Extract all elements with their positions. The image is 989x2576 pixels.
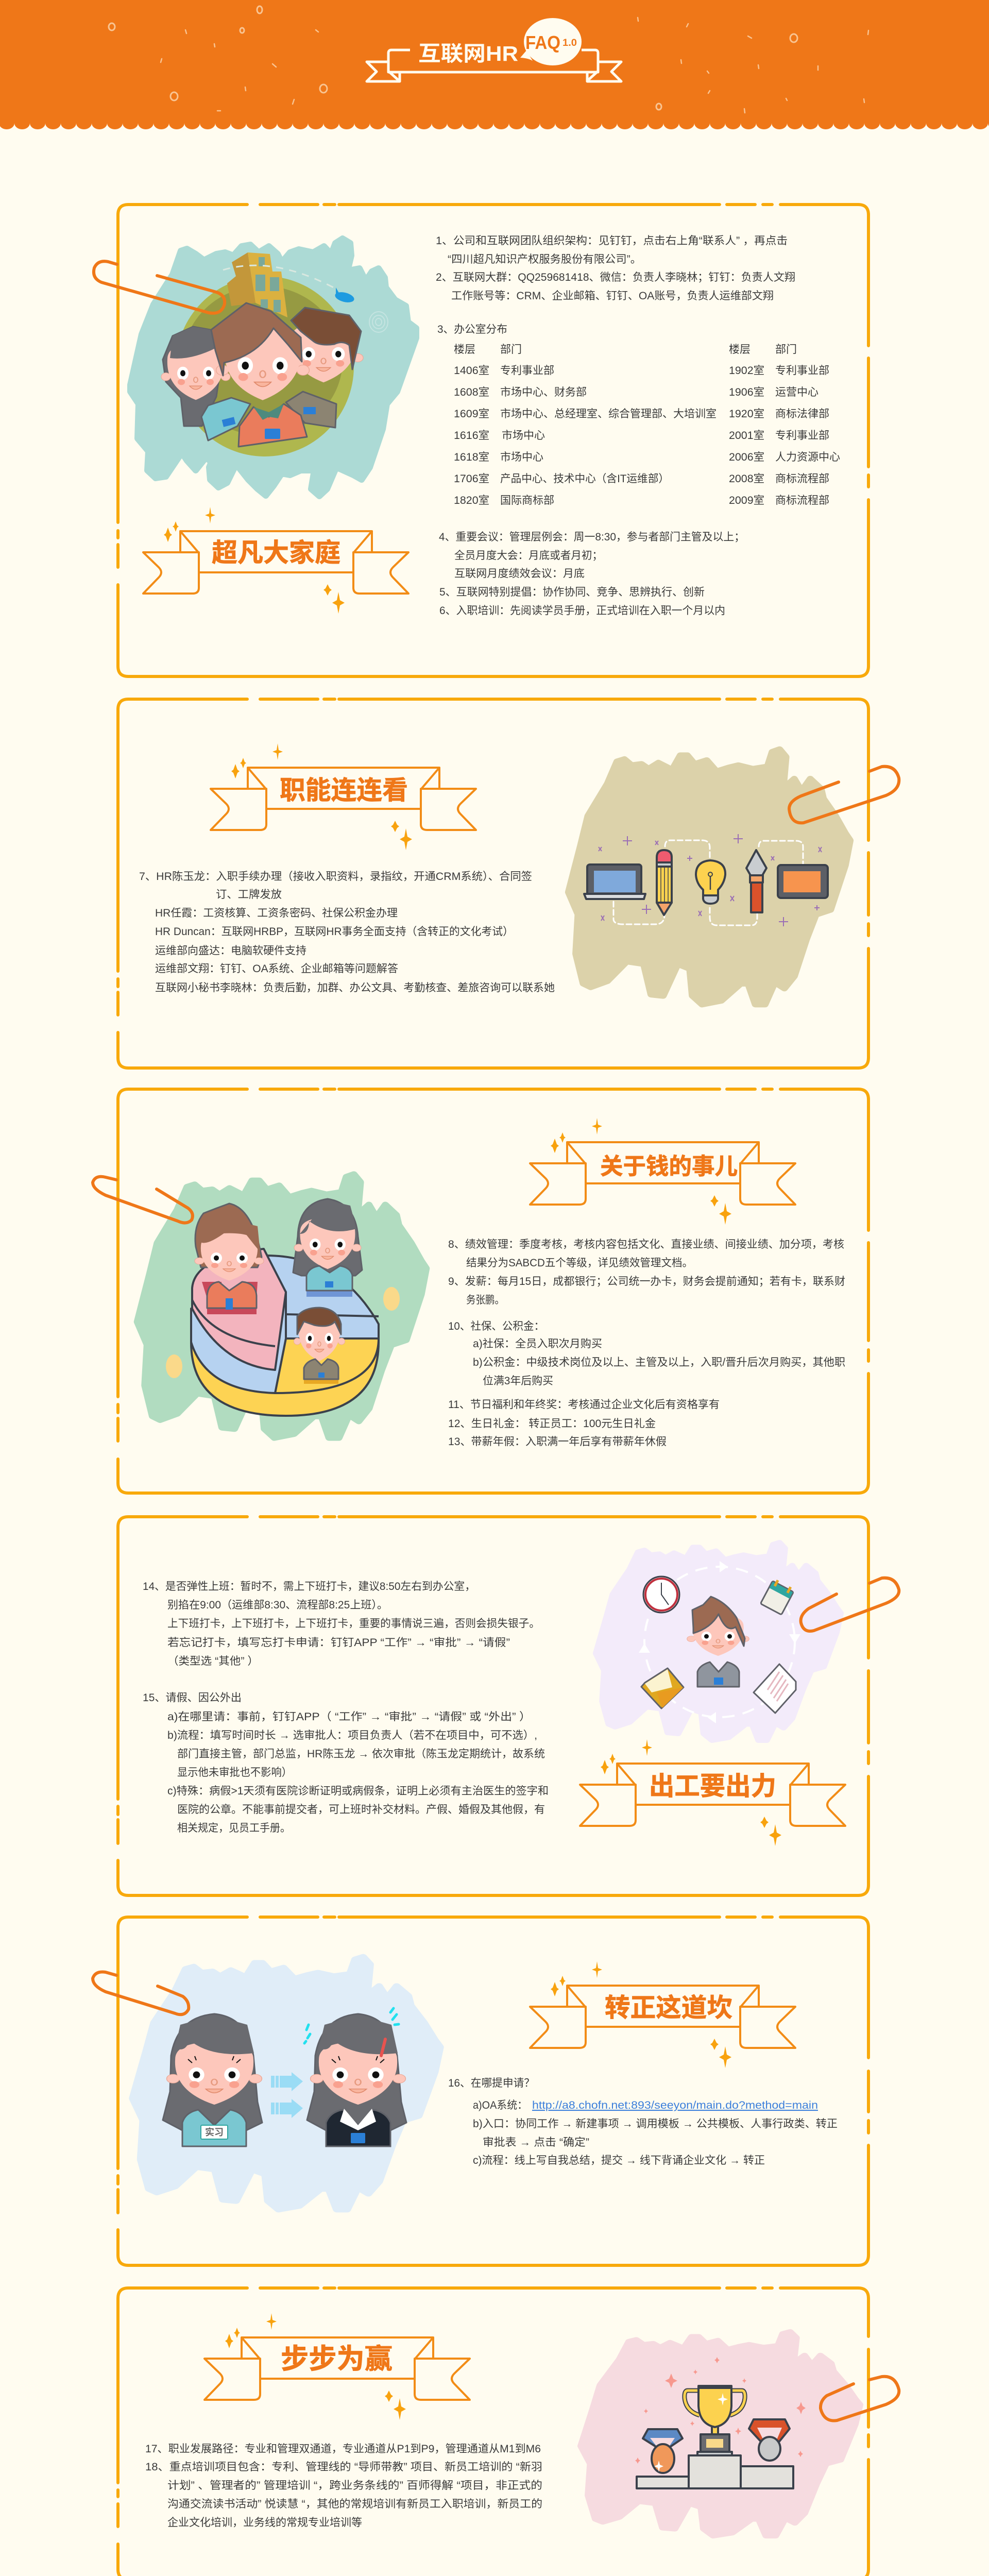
text block: item 16: http://a8.chofn.net:893/seeyon/main.do?method=main [532, 2099, 818, 2111]
speech bubble with FAQ: FAQ [525, 32, 560, 53]
office floor table: 1820室 [454, 495, 489, 506]
panel: 步步为赢 [118, 2288, 899, 2576]
text block: items 14-15: 上下班打卡，上下班打卡，上下班打卡，重要的事情说三遍，否则会损失银子。 [167, 1618, 540, 1630]
woman with brown hair [195, 1204, 264, 1314]
icon: fountain pen [746, 850, 766, 912]
pie slices [191, 1249, 379, 1416]
paper clip [93, 1177, 193, 1223]
podium [637, 2455, 793, 2488]
office floor table: 市场中心 [502, 430, 545, 442]
ribbon heading: 关于钱的事儿 [530, 1118, 795, 1225]
text block: items 8-13: 位满3年后购买 [483, 1375, 553, 1387]
arrows [271, 2072, 303, 2118]
text block: items 17-18: 计划” 、管理者的” 管理培训 “，跨业务条线的” 百师得解 “项目，非正式的 [167, 2480, 542, 2492]
text block: items 8-13: 10、社保、公积金： [448, 1320, 544, 1332]
text block: items 8-13: 8、绩效管理：季度考核，考核内容包括文化、直接业绩、间接业绩、加分项，考核 [448, 1239, 844, 1250]
ribbon heading: 职能连连看: 职能连连看 [280, 776, 408, 805]
employee [304, 2008, 406, 2146]
text block: items 14-15: 部门直接主管，部门总监，HR陈玉龙 → 依次审批（陈玉龙定期统计，故系统 [177, 1748, 545, 1760]
text block: items 4-6: 6、入职培训：先阅读学员手册，正式培训在入职一个月以内 [439, 605, 725, 617]
text block: items 17-18: 17、职业发展路径：专业和管理双通道，专业通道从P1到P9，管理通道从M1到M6 [145, 2443, 541, 2455]
office floor table: 部门 [775, 344, 797, 355]
ribbon heading: 转正这道坎 [530, 1961, 795, 2068]
text block: items 8-13: 13、带薪年假：入职满一年后享有带薪年休假 [448, 1436, 667, 1448]
text block: items 14-15: a)在哪里请：事前，钉钉APP（ “工作” → “审批” → “请假” 或 “外出” ） [167, 1711, 531, 1723]
icon: tablet [778, 865, 828, 898]
office floor table: 人力资源中心 [775, 451, 840, 463]
paper clip [93, 1972, 189, 2014]
text block: items 4-6: 互联网月度绩效会议：月底 [454, 568, 585, 580]
man on right [284, 308, 363, 428]
intern: 实习 [205, 2127, 224, 2138]
paper clip [789, 767, 899, 823]
office floor table: 市场中心 [500, 451, 543, 463]
text block: items 1-2: 2、互联网大群：QQ259681418、微信：负责人李晓林；钉钉：负责人文翔 [436, 272, 795, 283]
text block: items 8-13: 12、生日礼金： 转正员工：100元生日礼金 [448, 1418, 656, 1430]
text block: items 1-2: 工作账号等：CRM、企业邮箱、钉钉、OA账号，负责人运维部文翔 [451, 290, 774, 302]
panel: 关于钱的事儿 [93, 1089, 868, 1493]
ribbon heading: 超凡大家庭: 超凡大家庭 [212, 538, 340, 567]
speech bubble with FAQ: 1.0 [562, 38, 577, 48]
text block: items 8-13: 11、节日福利和年终奖：考核通过企业文化后有资格享有 [448, 1399, 720, 1411]
office floor table: 3、办公室分布 [437, 324, 507, 335]
text block: item 7: 7、HR陈玉龙：入职手续办理（接收入职资料，录指纹，开通CRM系统）、合同签 [139, 871, 532, 883]
illustration: intern becomes employee [133, 1957, 440, 2209]
icon: clock [643, 1577, 679, 1613]
office floor table: 产品中心、技术中心（含IT运维部） [500, 473, 669, 485]
ribbon heading: 关于钱的事儿: 关于钱的事儿 [600, 1154, 738, 1179]
text block: items 8-13: a)社保：全员入职次月购买 [473, 1338, 602, 1350]
office floor table: 1618室 [454, 451, 489, 463]
text block: items 14-15: 显示他未审批也不影响） [177, 1767, 292, 1778]
office floor table: 部门 [500, 344, 522, 355]
office floor table: 1906室 [729, 386, 764, 398]
text block: item 16: 审批表 → 点击 “确定” [483, 2137, 589, 2148]
office floor table: 1608室 [454, 386, 489, 398]
woman with grey hair [293, 1199, 362, 1297]
text block: items 4-6: 全员月度大会：月底或者月初； [454, 550, 603, 562]
illustration: team in front of building [130, 239, 416, 496]
office floor table: 市场中心、总经理室、综合管理部、大培训室 [500, 408, 717, 420]
speech bubble with FAQ [520, 18, 582, 65]
text block: item 16: a)OA系统： [473, 2099, 527, 2111]
paper clip [94, 261, 225, 313]
text block: items 8-13: 结果分为SABCD五个等级，详见绩效管理文档。 [466, 1257, 693, 1269]
header ribbon [367, 50, 621, 81]
text block: items 17-18: 企业文化培训，业务线的常规专业培训等 [167, 2517, 362, 2529]
icon: laptop [584, 865, 645, 899]
text block: item 16 [448, 2077, 838, 2166]
intern [163, 2014, 262, 2146]
woman in centre [211, 303, 309, 447]
text block: items 14-15 [143, 1581, 549, 1834]
paper clip [821, 2377, 899, 2421]
paper clip [801, 1578, 899, 1631]
ribbon heading: 出工要出力 [580, 1739, 845, 1846]
office floor table: 1609室 [454, 408, 489, 420]
text block: items 14-15: b)流程：填写时间时长 → 选审批人：项目负责人（若不在项目中，可不选）, [167, 1730, 537, 1741]
ribbon heading: 步步为赢 [204, 2313, 470, 2420]
text block: items 14-15: （类型选 “其他” ） [167, 1655, 259, 1667]
ribbon heading: 超凡大家庭 [143, 507, 408, 614]
icon: light bulb [696, 860, 725, 904]
text block: items 14-15: 相关规定，见员工手册。 [177, 1822, 291, 1834]
office floor table: 专利事业部 [775, 430, 829, 442]
office floor table: 专利事业部 [775, 365, 829, 377]
header title: 互联网HR [418, 42, 518, 65]
panel: 超凡大家庭 [94, 205, 868, 676]
text block: item 7: 订、工牌发放 [216, 889, 282, 901]
office floor table: 楼层 [729, 344, 751, 355]
man [294, 1308, 345, 1384]
illustration: pie chart with people [138, 1175, 426, 1437]
text block: item 7: 运维部文翔：钉钉、OA系统、企业邮箱等问题解答 [155, 963, 398, 975]
icon: paper [754, 1664, 796, 1713]
text block: item 7: 互联网小秘书李晓林：负责后勤，加群、办公文具、考勤核查、差旅咨询可以联系她 [155, 982, 555, 994]
illustration: employee and work cycle [596, 1543, 841, 1740]
bronze medal [643, 2429, 683, 2473]
employee [687, 1597, 749, 1687]
ribbon heading: 步步为赢: 步步为赢 [281, 2344, 393, 2375]
panel: 转正这道坎 [93, 1917, 868, 2265]
office floor table: 2008室 [729, 473, 764, 485]
text block: items 17-18: 18、重点培训项目包含：专利、管理线的 “导师带教” 项目、新员工培训的 “新羽 [145, 2461, 542, 2473]
office floor table: 运营中心 [775, 386, 819, 398]
text block: item 7: HR Duncan：互联网HRBP，互联网HR事务全面支持（含转正的文化考试） [155, 926, 514, 938]
text block: items 8-13: 9、发薪：每月15日，成都银行；公司统一办卡，财务会提前通知；若有卡，联系财 [448, 1276, 845, 1287]
illustration: trophy and medals [581, 2332, 860, 2536]
woman on left [161, 327, 250, 440]
text block: items 4-6: 4、重要会议：管理层例会：周一8:30，参与者部门主管及以上； [439, 531, 745, 543]
text block: items 8-13 [448, 1239, 845, 1448]
office floor table: 1616室 [454, 430, 489, 442]
text block: items 14-15: 别掐在9:00（运维部8:30、流程部8:25上班）。 [167, 1599, 388, 1611]
office floor table: 市场中心、财务部 [500, 386, 587, 398]
office floor table: 专利事业部 [500, 365, 554, 377]
text block: item 16: 16、在哪提申请？ [448, 2077, 535, 2089]
icon: calendar [760, 1578, 795, 1615]
text block: item 16: b)入口：协同工作 → 新建事项 → 调用模板 → 公共模板、人事行政类、转正 [473, 2118, 838, 2130]
trophy [685, 2386, 745, 2455]
office floor table: 楼层 [454, 344, 475, 355]
icon: envelope [641, 1668, 684, 1708]
ribbon heading: 出工要出力: 出工要出力 [649, 1772, 776, 1801]
text block: items 14-15: 15、请假、因公外出 [143, 1692, 242, 1704]
icon: pencil [657, 850, 672, 915]
office floor table: 2009室 [729, 495, 764, 506]
ribbon heading: 转正这道坎: 转正这道坎 [605, 1993, 732, 2022]
text block: item 16: c)流程：线上写自我总结，提交 → 线下背诵企业文化 → 转正 [473, 2155, 765, 2166]
header band [0, 0, 989, 129]
text block: items 1-2: 1、公司和互联网团队组织架构：见钉钉，点击右上角“联系人” ，再点击 [436, 235, 788, 247]
illustration: tools [569, 750, 850, 1004]
text block: item 7 [139, 871, 555, 994]
text block: item 7: HR任霞：工资核算、工资条密码、社保公积金办理 [155, 907, 398, 919]
office floor table: 商标流程部 [775, 495, 829, 506]
panel: 出工要出力 [118, 1517, 899, 1895]
text block: items 1-2 [436, 235, 795, 302]
text block: items 8-13: b)公积金：中级技术岗位及以上、主管及以上，入职/晋升后次月购买，其他职 [473, 1357, 845, 1368]
text block: items 14-15: 14、是否弹性上班：暂时不，需上下班打卡，建议8:50左右到办公室， [143, 1581, 475, 1592]
text block: items 14-15: c)特殊：病假>1天须有医院诊断证明或病假条，证明上必须有主治医生的签字和 [167, 1785, 549, 1797]
text block: items 17-18: 沟通交流读书活动” 悦读慧 “，其他的常规培训有新员工入职培训，新员工的 [167, 2498, 542, 2510]
office floor table: 1406室 [454, 365, 489, 377]
office floor table: 国际商标部 [500, 495, 554, 506]
text block: items 17-18 [145, 2443, 542, 2529]
office floor table: 1902室 [729, 365, 764, 377]
text block: items 4-6: 5、互联网特别提倡：协作协同、竞争、思辨执行、创新 [439, 586, 705, 598]
text block: items 14-15: 医院的公章。不能事前提交者，可上班时补交材料。产假、婚假及其他假，有 [177, 1804, 545, 1816]
panel: 职能连连看 [118, 699, 899, 1068]
office floor table: 商标法律部 [775, 408, 829, 420]
text block: items 8-13: 务张鹏。 [466, 1294, 504, 1306]
office floor table: 商标流程部 [775, 473, 829, 485]
office floor table: 1706室 [454, 473, 489, 485]
text block: items 4-6 [439, 531, 745, 617]
office floor table: 1920室 [729, 408, 764, 420]
silver medal [749, 2419, 790, 2461]
office floor table [437, 324, 840, 506]
text block: items 14-15: 若忘记打卡，填写忘打卡申请：钉钉APP “工作” → “审批” → “请假” [167, 1637, 510, 1649]
text block: items 1-2: “四川超凡知识产权服务股份有限公司”。 [448, 253, 641, 265]
ribbon heading: 职能连连看 [211, 743, 476, 850]
text block: item 7: 运维部向盛达：电脑软硬件支持 [155, 945, 306, 957]
office floor table: 2001室 [729, 430, 764, 442]
office floor table: 2006室 [729, 451, 764, 463]
